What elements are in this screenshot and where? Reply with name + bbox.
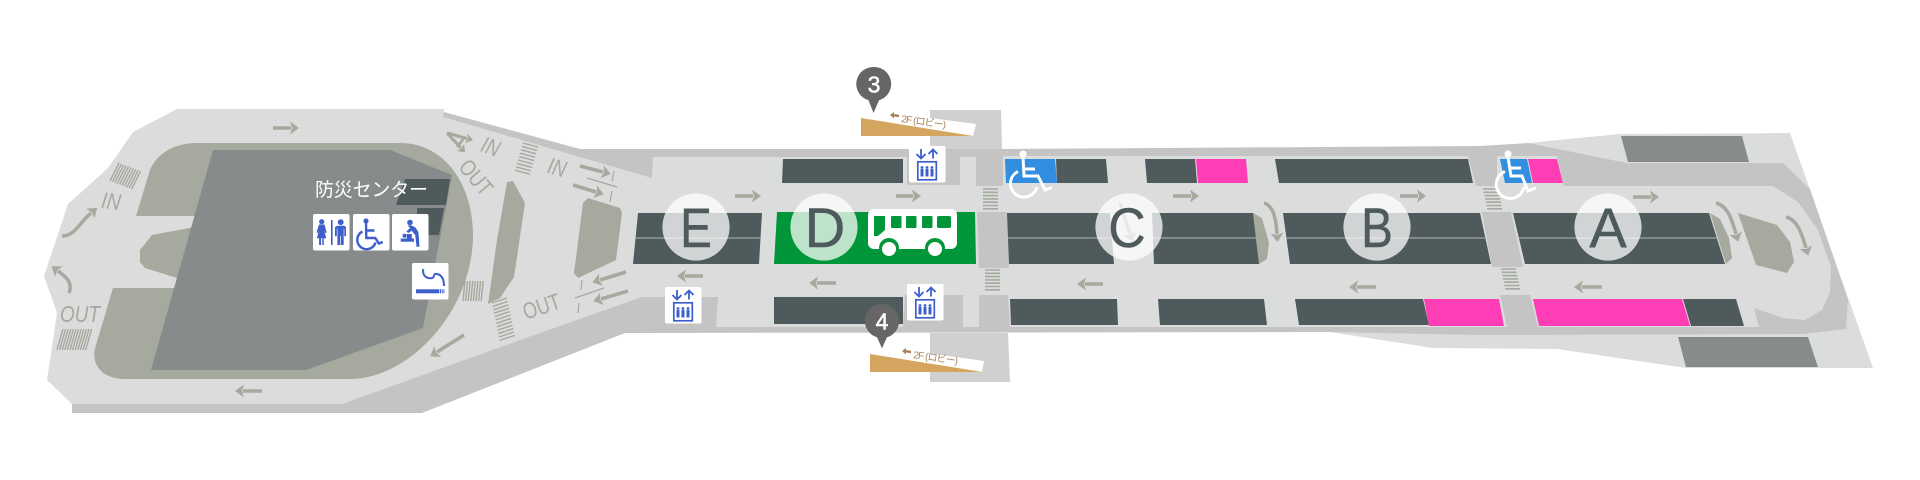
bus parking zone D	[774, 212, 976, 264]
zone letter D	[790, 193, 858, 261]
parking rows south	[1010, 299, 1744, 326]
zone letter E	[662, 193, 730, 261]
location pin 3	[856, 67, 891, 113]
icon: restrooms	[313, 214, 350, 250]
icon: accessible toilet	[353, 214, 390, 250]
grey outer spaces	[1621, 136, 1818, 367]
icon: elevator south	[907, 284, 944, 320]
IN OUT road markings	[60, 131, 569, 327]
IN OUT road markings: IN	[100, 187, 123, 215]
icon: smoking area	[412, 263, 448, 300]
zone letter B	[1343, 193, 1411, 261]
ramp 3: 2F (ロビー)	[901, 113, 947, 131]
ramp 4	[870, 345, 984, 372]
island entrance 2	[574, 198, 622, 278]
ramp 4: 2F (ロビー)	[913, 349, 959, 367]
icon: wheelchair in space 1	[1010, 150, 1052, 197]
row dividers	[635, 237, 1717, 239]
zone letter E: E	[680, 197, 712, 260]
crosswalks	[57, 143, 1520, 350]
IN OUT road markings: IN	[478, 131, 504, 162]
driving surface	[44, 109, 1831, 404]
centre label: 防災センター	[315, 179, 428, 201]
accessible spaces	[1005, 159, 1532, 183]
icon: elevator west	[665, 287, 702, 324]
landscaped area around the disaster centre	[94, 143, 473, 379]
parking rows C and B north	[1056, 159, 1473, 183]
zone letter A	[1574, 193, 1642, 261]
pink priority spaces	[1196, 159, 1690, 326]
islands by rows C and A	[1253, 213, 1794, 273]
IN OUT road markings: OUT	[519, 288, 564, 325]
icon: bus	[868, 209, 957, 258]
zone letter D: D	[805, 196, 845, 259]
parking row E and D north	[633, 159, 903, 324]
island entrance 1	[488, 181, 525, 304]
centre parking 2	[417, 208, 444, 235]
north stair stub	[930, 110, 1002, 149]
lane arrows	[58, 128, 1806, 391]
right outer apron	[1330, 133, 1873, 368]
gate bars	[575, 171, 617, 313]
IN OUT road markings: IN	[545, 152, 569, 182]
location pin 4: 4	[876, 308, 889, 334]
zone letter B: B	[1361, 197, 1393, 260]
disaster prevention centre building	[151, 150, 452, 370]
central blocks	[977, 212, 1523, 268]
island west of the centre	[140, 226, 200, 278]
zone letter C	[1095, 193, 1163, 261]
ramp 3	[861, 109, 976, 136]
icon: elevator north	[909, 146, 946, 182]
IN OUT road markings: OUT	[454, 154, 499, 201]
grey base of the car park	[72, 112, 1848, 413]
centre parking 1	[396, 179, 450, 205]
icon: baby changing	[392, 214, 428, 250]
zone letter C: C	[1108, 197, 1146, 259]
south stair stub	[930, 333, 1010, 382]
icon: wheelchair in space 2	[1496, 150, 1536, 198]
location pin 3: 3	[868, 72, 880, 98]
parking rows C B A middle	[1007, 213, 1725, 264]
location pin 4	[865, 304, 899, 348]
IN OUT road markings: OUT	[60, 301, 102, 327]
zone letter A: A	[1589, 196, 1627, 259]
